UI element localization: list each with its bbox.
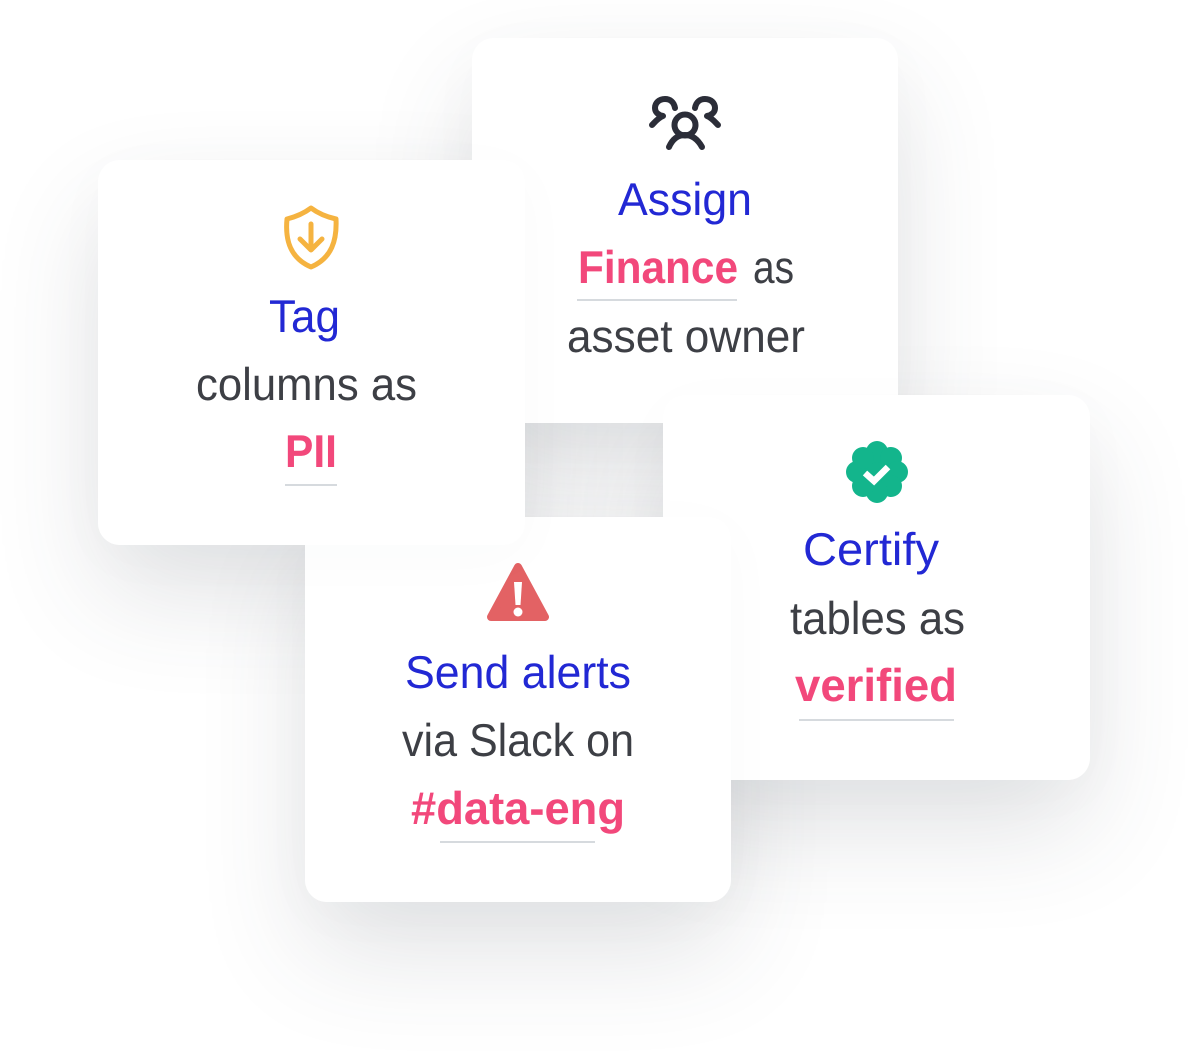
panel: assign card — [472, 38, 898, 423]
heading: assign: Assign — [618, 173, 752, 225]
text: via slack on: via Slack on — [402, 714, 634, 766]
text: data-eng channel: #data-eng — [411, 782, 625, 834]
text: verified: verified — [795, 659, 957, 711]
text: PII: PII — [285, 425, 337, 477]
text: finance as: as — [753, 241, 794, 293]
text: finance as: Finance — [578, 241, 738, 293]
heading: tag: Tag — [269, 290, 340, 342]
text: tables as: tables as — [790, 592, 965, 644]
icon: warning triangle — [491, 567, 545, 617]
panel: send alerts card — [305, 517, 731, 902]
panel: certify card — [663, 395, 1090, 780]
panel: tag card — [98, 160, 525, 545]
heading: send alerts: Send alerts — [405, 646, 631, 698]
icon: verified badge — [846, 441, 908, 503]
heading: certify: Certify — [803, 523, 939, 575]
icon: shield with arrow — [287, 208, 336, 267]
text: columns as: columns as — [196, 358, 417, 410]
icon: people group — [652, 99, 718, 147]
text: asset owner: asset owner — [567, 310, 805, 362]
